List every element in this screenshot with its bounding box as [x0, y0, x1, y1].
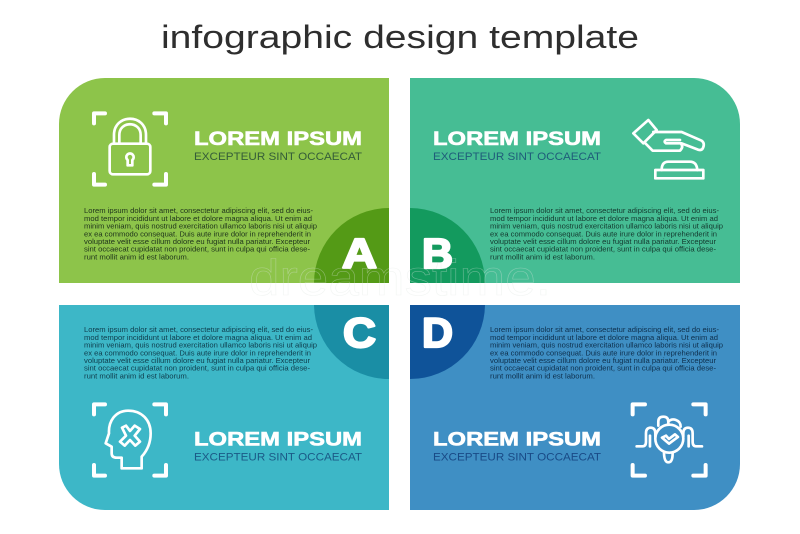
- watermark: dreamstime.: [249, 250, 551, 306]
- body text: C: Lorem ipsum dolor sit amet, consectetur adipiscing elit, sed do eius-: [84, 325, 314, 334]
- body text: D: [490, 325, 723, 380]
- body text: B: ex ea commodo consequat. Duis aute irure dolor in reprehenderit in: [490, 229, 717, 238]
- panel: B: [410, 78, 740, 283]
- body text: D: voluptate velit esse cillum dolore eu fugiat nulla pariatur. Excepteur: [490, 356, 717, 365]
- body text: D: sint occaecat cupidatat non proident, sunt in culpa qui officia dese-: [490, 364, 717, 373]
- icon: hand and button: [633, 120, 704, 178]
- subheading: B: EXCEPTEUR SINT OCCAECAT: [433, 151, 601, 163]
- badge: B: B: [422, 230, 453, 277]
- badge: A: [314, 208, 389, 283]
- body text: A: voluptate velit esse cillum dolore eu fugiat nulla pariatur. Excepteur: [84, 237, 311, 246]
- badge: C: C: [343, 309, 376, 356]
- body text: D: ex ea commodo consequat. Duis aute irure dolor in reprehenderit in: [490, 348, 717, 357]
- icon: verified fingerprint: [633, 404, 706, 476]
- body text: C: ex ea commodo consequat. Duis aute irure dolor in reprehenderit in: [84, 348, 311, 357]
- body text: C: mod tempor incididunt ut labore et dolore magna aliqua. Ut enim ad: [84, 333, 312, 342]
- badge: C: [314, 305, 389, 379]
- body text: A: [84, 206, 317, 261]
- body text: B: minim veniam, quis nostrud exercitation ullamco laboris nisi ut aliquip: [490, 222, 723, 231]
- body text: A: mod tempor incididunt ut labore et dolore magna aliqua. Ut enim ad: [84, 214, 312, 223]
- body text: D: runt mollit anim id est laborum.: [490, 371, 595, 380]
- body text: B: runt mollit anim id est laborum.: [490, 252, 595, 261]
- body text: A: runt mollit anim id est laborum.: [84, 252, 189, 261]
- icon: head with cross: [94, 404, 166, 476]
- panel: C: [59, 305, 389, 510]
- heading: B: LOREM IPSUM: [433, 129, 601, 150]
- body text: C: runt mollit anim id est laborum.: [84, 371, 189, 380]
- subheading: C: EXCEPTEUR SINT OCCAECAT: [194, 452, 362, 464]
- body text: A: minim veniam, quis nostrud exercitation ullamco laboris nisi ut aliquip: [84, 222, 317, 231]
- badge: D: [410, 305, 485, 379]
- body text: B: Lorem ipsum dolor sit amet, consectetur adipiscing elit, sed do eius-: [490, 206, 720, 215]
- body text: C: [84, 325, 317, 380]
- badge: B: [410, 208, 485, 283]
- body text: C: sint occaecat cupidatat non proident, sunt in culpa qui officia dese-: [84, 364, 311, 373]
- body text: C: minim veniam, quis nostrud exercitation ullamco laboris nisi ut aliquip: [84, 341, 317, 350]
- subheading: A: EXCEPTEUR SINT OCCAECAT: [194, 151, 362, 163]
- body text: D: Lorem ipsum dolor sit amet, consectetur adipiscing elit, sed do eius-: [490, 325, 720, 334]
- heading: D: LOREM IPSUM: [433, 430, 601, 450]
- title: infographic design template: [161, 19, 639, 55]
- badge: D: D: [422, 309, 453, 356]
- body text: A: ex ea commodo consequat. Duis aute irure dolor in reprehenderit in: [84, 229, 311, 238]
- body text: D: minim veniam, quis nostrud exercitation ullamco laboris nisi ut aliquip: [490, 341, 723, 350]
- panel: D: [410, 305, 740, 510]
- badge: A: A: [342, 230, 377, 277]
- subheading: D: EXCEPTEUR SINT OCCAECAT: [433, 452, 601, 464]
- heading: A: LOREM IPSUM: [194, 129, 362, 150]
- body text: B: [490, 206, 723, 261]
- icon: padlock: [94, 113, 166, 185]
- heading: C: LOREM IPSUM: [194, 430, 362, 450]
- body text: B: voluptate velit esse cillum dolore eu fugiat nulla pariatur. Excepteur: [490, 237, 717, 246]
- body text: B: mod tempor incididunt ut labore et dolore magna aliqua. Ut enim ad: [490, 214, 718, 223]
- body text: C: voluptate velit esse cillum dolore eu fugiat nulla pariatur. Excepteur: [84, 356, 311, 365]
- panel: A: [59, 78, 389, 283]
- body text: A: Lorem ipsum dolor sit amet, consectetur adipiscing elit, sed do eius-: [84, 206, 314, 215]
- body text: B: sint occaecat cupidatat non proident, sunt in culpa qui officia dese-: [490, 245, 717, 254]
- body text: A: sint occaecat cupidatat non proident, sunt in culpa qui officia dese-: [84, 245, 311, 254]
- body text: D: mod tempor incididunt ut labore et dolore magna aliqua. Ut enim ad: [490, 333, 718, 342]
